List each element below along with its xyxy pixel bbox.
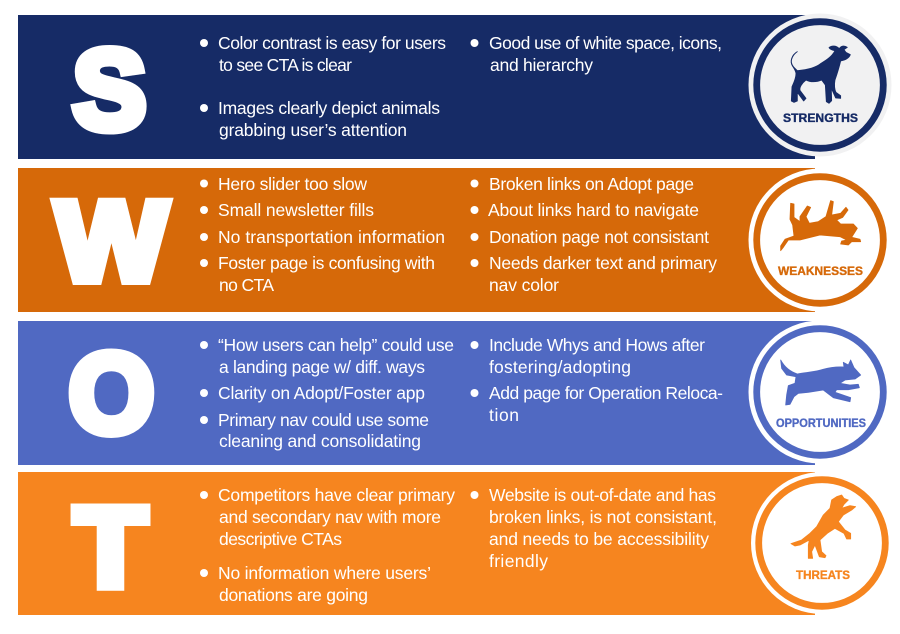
letter T: T: [74, 485, 146, 610]
bullets: strengths right column: Good use of white space, icons,: [489, 33, 722, 53]
bullets: weaknesses left column: No transportation information: [218, 227, 445, 247]
bullets: threats left column: Competitors have clear primary: [218, 485, 455, 505]
panel: opportunities: [18, 320, 892, 465]
icon: rolling dog: [781, 201, 861, 251]
icon: standing dog: [791, 46, 850, 103]
bullets: threats right column: [470, 485, 717, 571]
bullets: strengths right column: [470, 33, 722, 75]
bullets: strengths right column: and hierarchy: [490, 55, 593, 75]
badge: weaknesses: [748, 168, 892, 312]
panel: threats: [18, 472, 893, 615]
bullets: weaknesses right column: [470, 174, 717, 295]
icon: running dog: [781, 360, 861, 405]
bullets: weaknesses right column: Donation page not consistant: [489, 227, 709, 247]
badge: strengths: [748, 14, 892, 156]
bullets: opportunities right column: [470, 335, 723, 425]
bullets: opportunities left column: Primary nav could use some: [218, 410, 429, 430]
panel: strengths: [18, 14, 892, 159]
bullets: opportunities right column: Add page for Operation Reloca-: [489, 383, 723, 403]
panel: weaknesses: [18, 168, 892, 312]
icon: jumping dog: [791, 495, 856, 558]
bullets: opportunities left column: [200, 335, 454, 451]
bullets: threats left column: No information where users’: [218, 563, 431, 583]
bullets: weaknesses right column: About links hard to navigate: [488, 200, 699, 220]
label: opportunities: OPPORTUNITIES: [776, 416, 866, 430]
bullets: weaknesses left column: [200, 174, 445, 295]
bullets: opportunities right column: tion: [489, 405, 519, 425]
bullets: weaknesses left column: Small newsletter fills: [218, 200, 374, 220]
bullets: opportunities left column: cleaning and consolidating: [219, 431, 421, 451]
bullets: strengths left column: grabbing user’s attention: [219, 120, 407, 140]
bullets: weaknesses right column: Needs darker text and primary: [489, 253, 717, 273]
bullets: threats left column: and secondary nav with more: [219, 507, 441, 527]
badge: threats: [751, 472, 893, 614]
bullets: strengths left column: [200, 33, 446, 140]
letter S: S: [73, 28, 146, 152]
bullets: threats right column: friendly: [489, 551, 548, 571]
bullets: threats right column: Website is out-of-date and has: [489, 485, 716, 505]
bullets: opportunities left column: “How users can help” could use: [218, 335, 454, 355]
bullets: weaknesses left column: Foster page is confusing with: [218, 253, 435, 273]
bullets: opportunities right column: fostering/adopting: [489, 357, 631, 377]
label: threats: THREATS: [796, 568, 850, 582]
bullets: weaknesses left column: Hero slider too slow: [218, 174, 367, 194]
letter O: O: [69, 331, 154, 456]
bullets: threats left column: descriptive CTAs: [219, 529, 342, 549]
bullets: threats left column: donations are going: [219, 585, 368, 605]
bullets: opportunities right column: Include Whys and Hows after: [489, 335, 705, 355]
bullets: strengths left column: Images clearly depict animals: [218, 98, 440, 118]
bullets: strengths left column: Color contrast is easy for users: [218, 33, 446, 53]
bullets: weaknesses left column: no CTA: [219, 275, 274, 295]
bullets: weaknesses right column: Broken links on Adopt page: [489, 174, 694, 194]
label: strengths: STRENGTHS: [783, 111, 858, 125]
bullets: threats right column: broken links, is not consistant,: [489, 507, 717, 527]
bullets: threats left column: [200, 485, 455, 605]
bullets: threats right column: and needs to be accessibility: [489, 529, 709, 549]
bullets: opportunities left column: Clarity on Adopt/Foster app: [218, 383, 425, 403]
label: weaknesses: WEAKNESSES: [778, 264, 863, 278]
bullets: weaknesses right column: nav color: [489, 275, 559, 295]
letter W: W: [56, 179, 167, 304]
bullets: opportunities left column: a landing page w/ diff. ways: [219, 357, 425, 377]
badge: opportunities: [748, 320, 892, 464]
bullets: strengths left column: to see CTA is clear: [219, 55, 352, 75]
